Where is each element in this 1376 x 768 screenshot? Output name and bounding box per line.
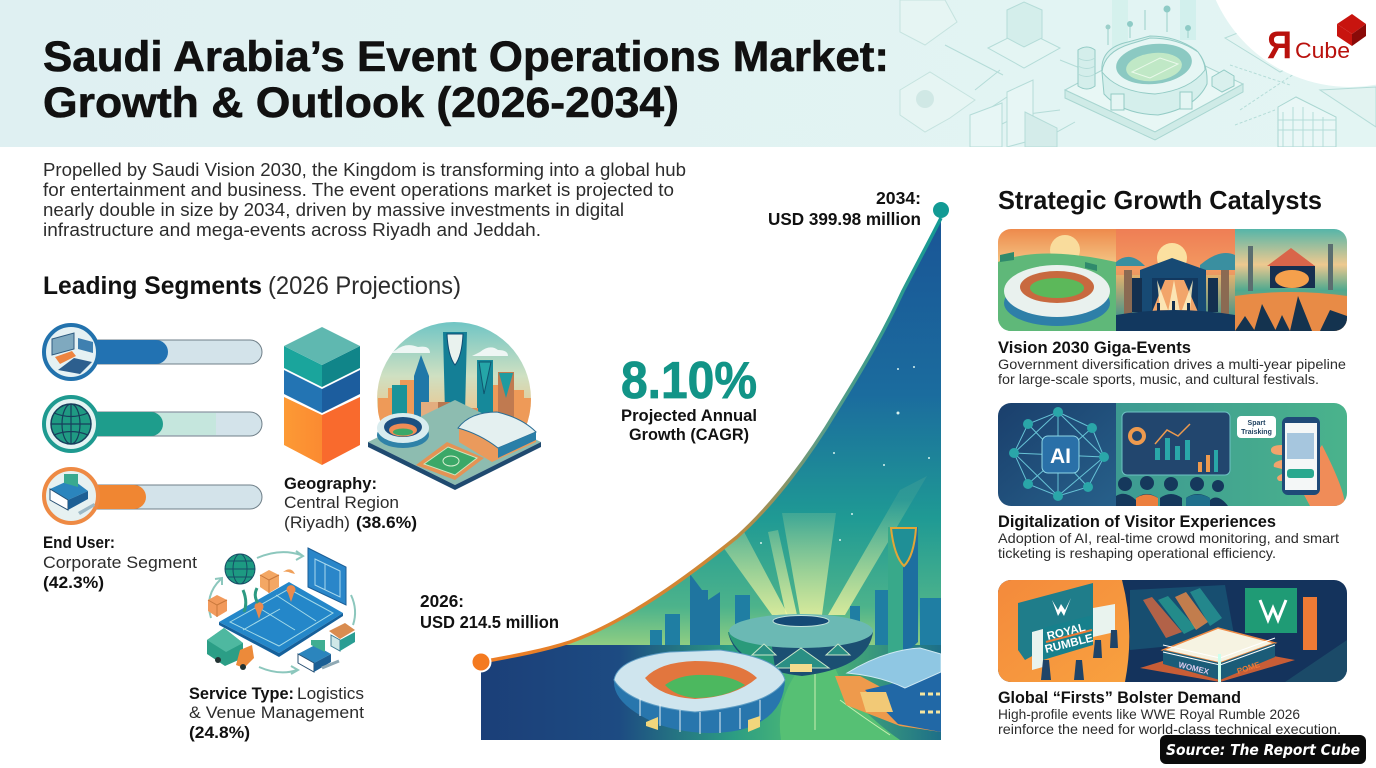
image: stadium, concert, festival: [998, 229, 1347, 331]
title: Growth & Outlook (2026-2034): [43, 80, 679, 127]
catalyst 2 description: [998, 530, 1339, 561]
image: Royal Rumble wrestling arena: ROYAL: [1046, 622, 1087, 643]
intro paragraph: nearly double in size by 2034, driven by massive investments in digital: [43, 200, 624, 220]
callout: CAGR: Projected Annual: [621, 406, 757, 425]
globe: [225, 554, 255, 584]
warehouse: [329, 623, 355, 651]
header illustration: isometric stadium and city: [900, 0, 1376, 147]
label: 2026 value: [420, 591, 559, 632]
progress bar 2: [80, 412, 262, 436]
icon: conference hall: [44, 325, 98, 379]
image: AI network, dashboard, smart ticket phone: Traisking: [1241, 429, 1272, 436]
ground: [481, 645, 941, 740]
logo: RCube: Cube: [1295, 38, 1350, 63]
catalyst 3 description: [998, 706, 1341, 737]
title: [43, 34, 889, 127]
kingdom centre tower: [888, 527, 918, 656]
end point marker: [933, 202, 949, 218]
stadium: [1102, 36, 1207, 115]
label: 2034 value: 2034:: [876, 188, 921, 208]
logo cube: [1337, 14, 1366, 46]
text: geography: (Riyadh): [284, 514, 350, 532]
panel: segment progress bars: [44, 325, 262, 523]
catalyst 2 title: Digitalization of Visitor Experiences: [998, 513, 1276, 531]
boxes: [208, 569, 295, 617]
catalyst 3 title: Global “Firsts” Bolster Demand: [998, 689, 1241, 707]
heading: leading segments: (2026 Projections): [268, 272, 461, 300]
catalyst 3 description: High-profile events like WWE Royal Rumble 2026: [998, 706, 1300, 722]
icon: globe: [44, 397, 98, 451]
heading: leading segments: [43, 272, 461, 300]
catalyst 1 title: Vision 2030 Giga-Events: [998, 339, 1191, 357]
arena left: [377, 413, 429, 448]
text: service type: Logistics: [297, 685, 364, 703]
growth curve line: [481, 218, 941, 662]
image: AI network, dashboard, smart ticket phone: AI: [1050, 445, 1071, 468]
illustration: logistics and venue: [207, 548, 355, 674]
heading: leading segments: Leading Segments: [43, 272, 262, 300]
text: geography: Geography:: [284, 475, 377, 493]
panel: catalyst 1 vision 2030: [998, 229, 1347, 387]
kingdom tower: [443, 332, 467, 413]
image: Royal Rumble wrestling arena: POME: [1236, 660, 1262, 676]
text: geography: Central Region: [284, 494, 399, 512]
callout: CAGR: [621, 352, 757, 444]
progress bar 1: [80, 340, 262, 364]
skyline: [650, 574, 941, 650]
title: Saudi Arabia’s Event Operations Market:: [43, 34, 889, 81]
text: geography: [284, 475, 417, 532]
map pins: [243, 585, 296, 619]
area fill with skyline scene: [481, 210, 941, 740]
glow columns: [1112, 0, 1128, 50]
catalyst 3 description: reinforce the need for world-class technical execution.: [998, 721, 1341, 737]
text: service type: & Venue Management: [189, 704, 364, 722]
icon: ticket device: [44, 469, 98, 523]
sky circle: [377, 322, 531, 424]
label: 2034 value: [768, 188, 921, 229]
heading: strategic growth catalysts: Strategic Growth Catalysts: [998, 185, 1322, 215]
start point marker: [472, 652, 490, 672]
image: AI network, dashboard, smart ticket phone: [998, 403, 1347, 506]
image: AI network, dashboard, smart ticket phone: Spart: [1248, 420, 1266, 427]
crowd: [1116, 476, 1228, 506]
logo letter R mirrored: R: [1267, 24, 1292, 67]
arena building right: [835, 648, 941, 732]
stars: [760, 366, 930, 544]
catalyst 2 description: Adoption of AI, real-time crowd monitoring, and smart: [998, 530, 1339, 546]
text: geography: (38.6%): [356, 514, 417, 532]
catalyst 2 description: ticketing is reshaping operational efficiency.: [998, 545, 1276, 561]
light rays: [723, 476, 927, 615]
image: Royal Rumble wrestling arena: RUMBLE: [1044, 632, 1095, 656]
text: end user: (42.3%): [43, 574, 104, 592]
image: Royal Rumble wrestling arena: [998, 580, 1347, 682]
progress bar 3: [80, 485, 262, 509]
chart: market growth area curve: [472, 202, 949, 740]
intro paragraph: for entertainment and business. The event operations market is projected to: [43, 180, 674, 200]
base plate: [368, 400, 541, 485]
panel: catalyst 2 digitalization: [998, 403, 1347, 561]
intro paragraph: infrastructure and mega-events across Riyadh and Jeddah.: [43, 220, 541, 240]
icon: stacked 3d block: [284, 327, 360, 465]
source badge: [1160, 735, 1366, 764]
catalyst 1 description: Government diversification drives a multi-year pipeline: [998, 356, 1346, 372]
right side elements: [1224, 33, 1284, 72]
truck: [207, 628, 254, 670]
callout: CAGR: Growth (CAGR): [629, 425, 749, 444]
text: end user: Corporate Segment: [43, 554, 197, 572]
text: service type: [189, 685, 364, 742]
label: 2034 value: USD 399.98 million: [768, 209, 921, 229]
catalyst 1 description: for large-scale sports, music, and cultural festivals.: [998, 371, 1319, 387]
callout: CAGR: 8.10%: [621, 352, 757, 410]
ticket scanner: [298, 640, 339, 672]
text: service type: Service Type:: [189, 685, 294, 703]
logo backdrop: [1203, 0, 1376, 87]
intro paragraph: Propelled by Saudi Vision 2030, the Kingdom is transforming into a global hub: [43, 160, 686, 180]
label: 2026 value: 2026:: [420, 591, 464, 611]
map diamond: [219, 582, 343, 653]
wall screen: [308, 548, 346, 605]
small cube: [1212, 70, 1234, 92]
catalyst 1 description: [998, 356, 1346, 387]
illustration: Riyadh city: [368, 320, 541, 490]
source badge: Source: The Report Cube: [1166, 741, 1360, 759]
text: end user: [43, 534, 197, 592]
arena right: [458, 412, 536, 462]
text: service type: (24.8%): [189, 724, 250, 742]
text: end user: End User:: [43, 534, 115, 552]
panel: catalyst 3 global firsts: [998, 580, 1347, 737]
header banner: [0, 0, 1376, 147]
label: 2026 value: USD 214.5 million: [420, 612, 559, 632]
image: Royal Rumble wrestling arena: WOMEX: [1178, 660, 1211, 677]
intro paragraph: [43, 160, 686, 240]
platform: [1064, 66, 1244, 132]
stacked server: [1078, 47, 1095, 89]
cycle arrows: [209, 551, 355, 674]
skyscrapers: [392, 355, 514, 434]
logo: RCube: [1267, 14, 1366, 67]
pitch: [416, 442, 484, 480]
main stadium: [614, 650, 785, 734]
dome stadium: [728, 614, 873, 676]
